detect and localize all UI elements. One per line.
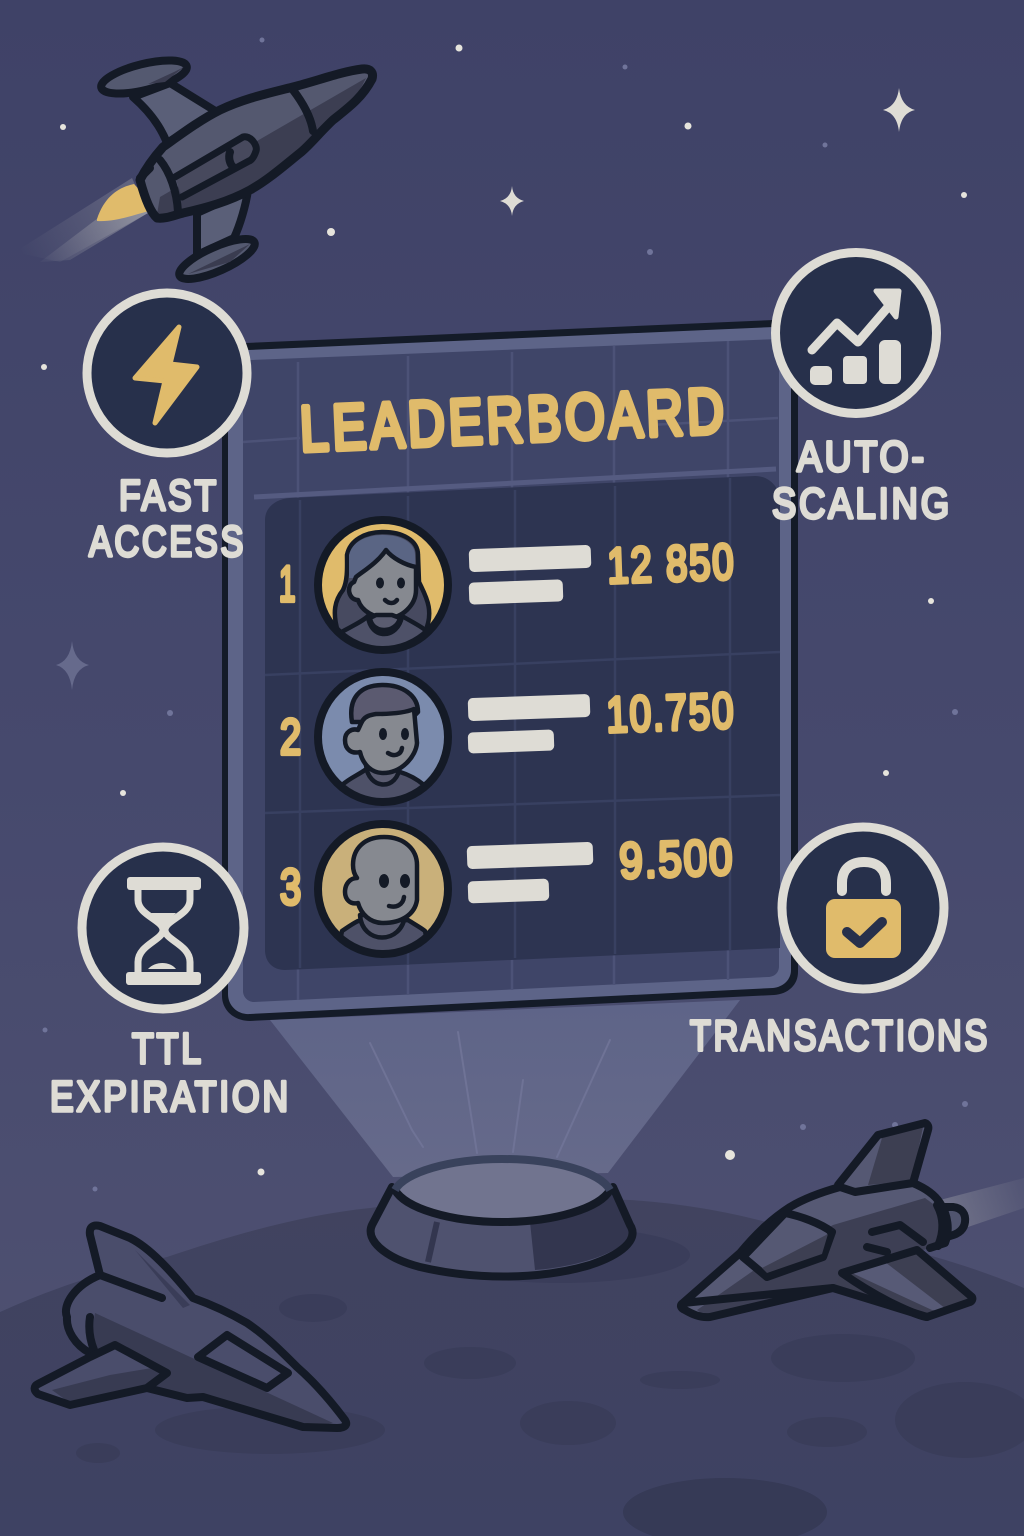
rocket hull seams xyxy=(140,90,313,212)
label: ttl expiration: TTL xyxy=(132,1025,204,1073)
shuttle canopy xyxy=(743,1213,832,1277)
rocket body xyxy=(140,69,373,220)
icon: padlock with check xyxy=(782,827,944,989)
score 1: 12 850 xyxy=(606,534,736,594)
rank 2: 2 xyxy=(280,709,303,765)
avatar 2 xyxy=(318,672,448,810)
feature: auto-scaling xyxy=(772,252,952,528)
feature: transactions xyxy=(690,827,990,1060)
shuttle exhaust trail xyxy=(940,1178,1024,1228)
avatar 1 xyxy=(318,520,448,660)
label: auto-scaling: AUTO- xyxy=(797,433,927,481)
shuttle panel lines xyxy=(867,1225,923,1252)
row 3 xyxy=(280,824,735,965)
avatar 3 xyxy=(318,824,448,965)
shuttle engine xyxy=(943,1207,965,1238)
label: fast access xyxy=(89,472,246,566)
shuttle fuselage xyxy=(681,1183,950,1320)
feature: fast access xyxy=(87,293,247,566)
moon ground xyxy=(0,1198,1024,1536)
rocket top left xyxy=(15,54,373,287)
beam rays xyxy=(370,1032,610,1157)
list background xyxy=(265,476,780,970)
label: ttl expiration: EXPIRATION xyxy=(50,1073,291,1121)
projector base xyxy=(371,1159,633,1277)
score 3: 9.500 xyxy=(618,829,735,889)
shuttle tail fin xyxy=(838,1123,928,1192)
leaderboard panel frame xyxy=(222,320,798,1021)
shuttle wing xyxy=(833,1250,972,1317)
panel grid lines xyxy=(243,341,778,1000)
row 2 xyxy=(280,672,736,810)
left shuttle canopy xyxy=(198,1335,288,1388)
label: fast access: FAST xyxy=(119,472,219,520)
sparkle star top right xyxy=(883,88,915,132)
rocket flame xyxy=(97,184,149,221)
panel header rule xyxy=(254,469,776,497)
name bars 3 xyxy=(467,842,593,903)
label: auto-scaling xyxy=(772,433,952,528)
label: ttl expiration xyxy=(50,1025,291,1121)
row 1 xyxy=(279,520,736,660)
rocket lower fin xyxy=(175,190,259,287)
icon: lightning bolt xyxy=(87,293,247,453)
shuttle bottom right xyxy=(681,1123,1024,1320)
rocket upper fin xyxy=(98,54,217,143)
feature: ttl expiration xyxy=(50,847,291,1121)
rocket exhaust trail xyxy=(15,178,148,262)
name bars 1 xyxy=(469,545,591,605)
hologram projection beam xyxy=(270,1000,740,1177)
rank 1: 1 xyxy=(279,556,297,612)
icon: growth chart xyxy=(776,252,936,414)
sparkle star left dim xyxy=(56,641,89,690)
name bars 2 xyxy=(468,694,590,753)
left shuttle fuselage xyxy=(66,1225,346,1430)
rocket window xyxy=(175,137,256,197)
shuttle canopy shade xyxy=(762,1234,828,1273)
shuttle bottom left xyxy=(35,1225,346,1430)
icon: hourglass xyxy=(82,847,244,1009)
label: auto-scaling: SCALING xyxy=(772,480,952,528)
score 2: 10.750 xyxy=(605,683,736,743)
title: LEADERBOARD xyxy=(298,374,729,465)
label: fast access: ACCESS xyxy=(89,518,246,566)
left shuttle wing xyxy=(35,1345,167,1405)
rank 3: 3 xyxy=(280,859,303,915)
sparkle star center xyxy=(500,186,524,216)
